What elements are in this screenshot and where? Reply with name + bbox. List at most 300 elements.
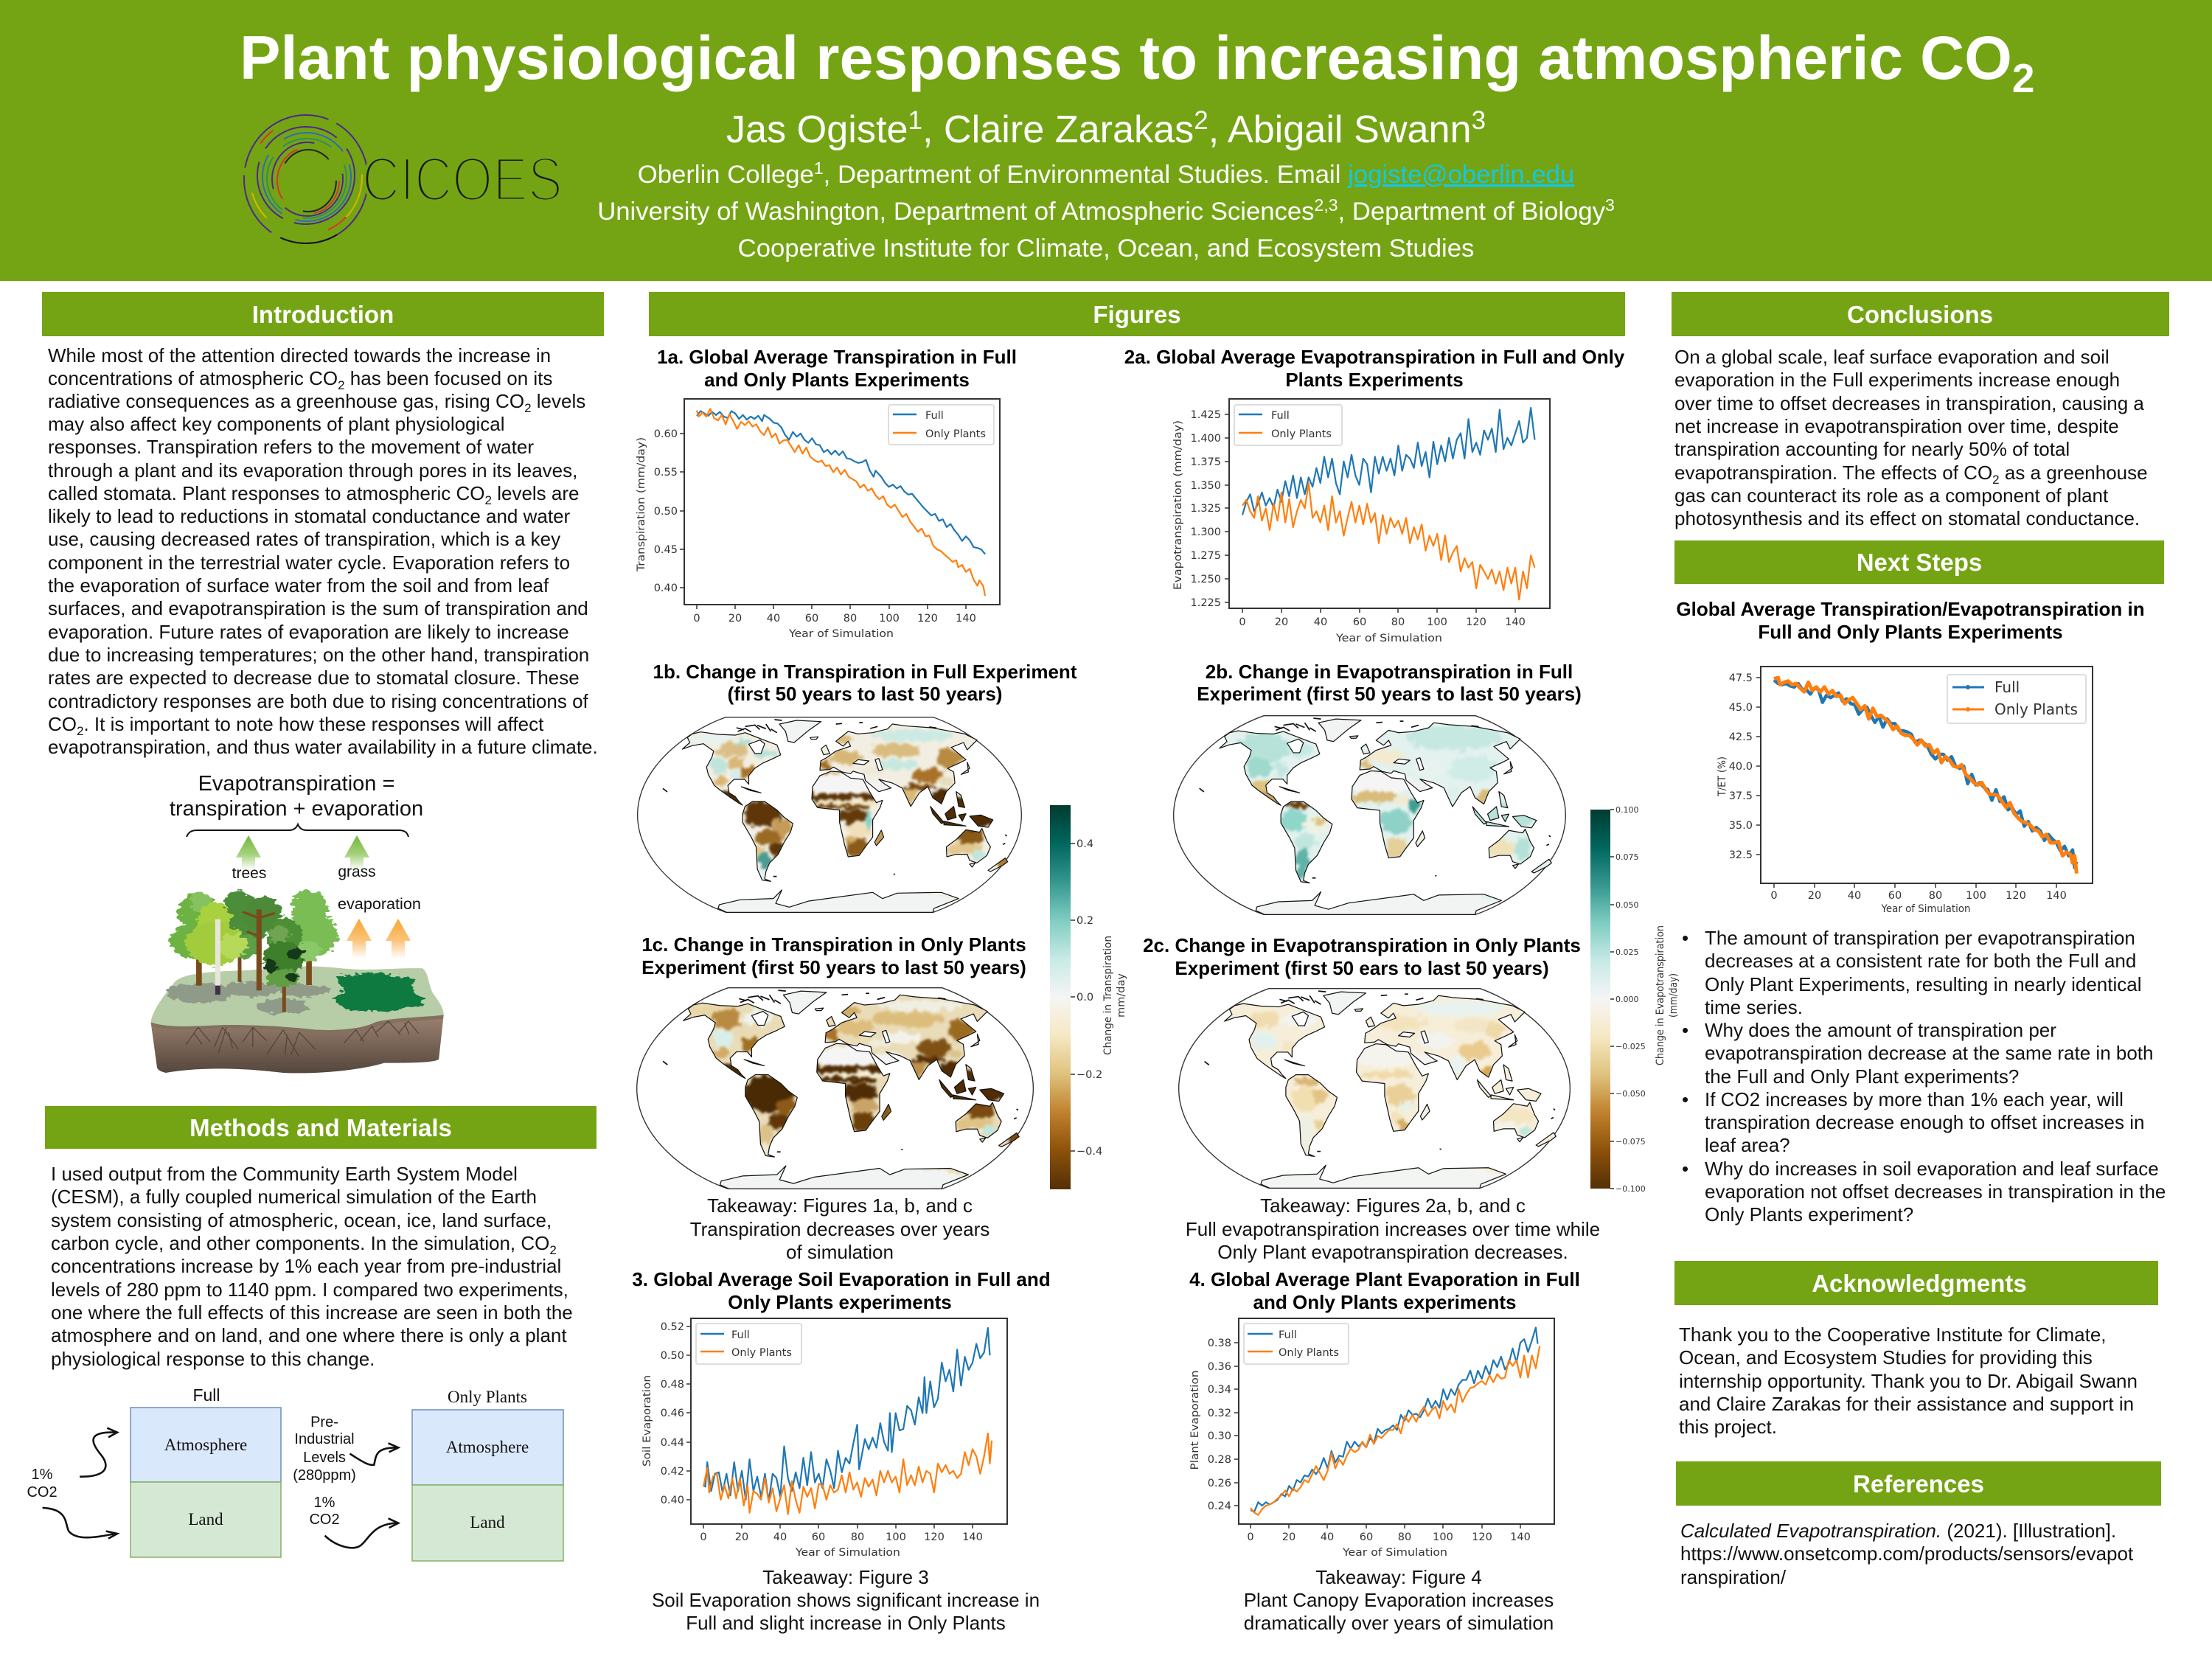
line chart: T/ET (1717, 667, 2093, 915)
line chart: 3 soil evaporation: 20 (735, 1531, 748, 1543)
heading: figure 2b: 2b. Change in Evapotranspiration in Full (1206, 661, 1573, 683)
illustration: evapotranspiration: evaporation (338, 894, 421, 913)
text block: conclusions: On a global scale, leaf surface evaporation and soil (1674, 346, 2110, 368)
line chart: 4 plant evaporation: Full (1279, 1329, 1297, 1341)
line chart: 2a evapotranspiration: 0 (1239, 616, 1246, 628)
line chart: T/ET: Full (1994, 678, 2020, 696)
heading: conclusions (1672, 292, 2169, 336)
authors: , Abigail Swann (1208, 108, 1472, 151)
line chart: 1a transpiration: 80 (844, 613, 857, 625)
text block: next steps bullets: The amount of transpiration per evapotranspiration (1705, 927, 2135, 949)
line chart: 3 soil evaporation: 40 (773, 1531, 787, 1543)
line chart: 1a transpiration: 100 (879, 613, 900, 625)
line chart: 2a evapotranspiration: Evapotranspiration (mm/day) (1172, 420, 1184, 590)
line chart: 1a transpiration: 0.50 (654, 506, 678, 518)
text block: takeaway figures 1: Takeaway: Figures 1a, b, and c (707, 1194, 973, 1217)
line chart: T/ET: 37.5 (1729, 790, 1753, 802)
panel: references (1676, 1461, 2161, 1588)
heading: figure 2a: Plants Experiments (1285, 369, 1464, 391)
line chart: 4 plant evaporation: Plant Evaporation (1189, 1370, 1201, 1470)
heading: next steps: Next Steps (1857, 549, 1982, 576)
colorbar: evapotranspiration: 0.050 (1615, 900, 1638, 910)
line chart: T/ET: 47.5 (1729, 672, 1753, 684)
line chart: 4 plant evaporation: 0.24 (1208, 1500, 1231, 1512)
line chart: 3 soil evaporation: 80 (851, 1531, 864, 1543)
label: 1% CO2 left: CO2 (27, 1484, 58, 1500)
text block: takeaway figure 3: Full and slight increase in Only Plants (686, 1612, 1006, 1634)
line chart: 3 soil evaporation: 0 (700, 1531, 707, 1543)
line chart: 4 plant evaporation (1189, 1318, 1554, 1559)
illustration: evapotranspiration (151, 772, 444, 1073)
text block: acknowledgments: internship opportunity. Thank you to Dr. Abigail Swann (1679, 1370, 2138, 1392)
text block: next steps bullets: evapotranspiration decrease at the same rate in both (1705, 1042, 2153, 1064)
text block: conclusions: as a greenhouse (2000, 462, 2148, 484)
icon: green arrow grass (344, 835, 369, 870)
colorbar: evapotranspiration: Change in Evapotranspiration (1655, 925, 1666, 1065)
text block: methods: (CESM), a fully coupled numerical simulation of the Earth (51, 1186, 537, 1208)
text block: next steps bullets: transpiration decrease enough to offset increases in (1705, 1111, 2144, 1133)
line chart: 4 plant evaporation: 80 (1398, 1531, 1411, 1543)
text block: next steps bullets: time series. (1705, 996, 1803, 1018)
authors: 3 (1472, 106, 1486, 135)
box: full experiment: Land (188, 1510, 223, 1528)
text block: next steps bullets: Why do increases in soil evaporation and leaf surface (1705, 1158, 2159, 1180)
heading: next steps chart (1676, 598, 2145, 643)
text block: conclusions: transpiration accounting for nearly 50% of total (1674, 438, 2070, 460)
label: pre-industrial and 1% CO2 middle: (280ppm) (293, 1467, 356, 1484)
line chart: 1a transpiration (636, 399, 1000, 640)
icon: orange arrow 2 (386, 919, 411, 959)
text block: next steps bullets: • (1682, 927, 1688, 949)
text block: introduction: use, causing decreased rates of transpiration, which is a key (48, 528, 560, 550)
line chart: 2a evapotranspiration (1172, 399, 1550, 644)
text block: next steps bullets: decreases at a consistent rate for both the Full and (1705, 950, 2136, 972)
text block: introduction: 2 (77, 724, 83, 738)
label: pre-industrial and 1% CO2 middle (293, 1414, 356, 1528)
line chart: 2a evapotranspiration: 140 (1505, 616, 1526, 628)
text block: conclusions: evaporation in the Full experiments increase enough (1674, 369, 2120, 391)
heading: figure 3 (632, 1268, 1051, 1313)
line chart: 2a evapotranspiration: 1.300 (1190, 526, 1221, 538)
text block: takeaway figure 4 (1244, 1566, 1554, 1634)
line chart: 3 soil evaporation: Year of Simulation (795, 1547, 900, 1559)
colorbar: transpiration (1050, 805, 1127, 1189)
heading: next steps chart: Full and Only Plants Experiments (1758, 621, 2063, 643)
text block: conclusions: gas can counteract its role as a component of plant (1674, 484, 2109, 507)
line chart: 2a evapotranspiration: 1.275 (1190, 550, 1221, 562)
line chart: 3 soil evaporation: 60 (812, 1531, 825, 1543)
line chart: T/ET: 32.5 (1729, 849, 1753, 861)
line chart: 2a evapotranspiration: 60 (1353, 616, 1366, 628)
heading: methods and materials (45, 1106, 597, 1149)
heading: introduction: Introduction (252, 301, 394, 328)
line chart: 1a transpiration: Only Plants (925, 428, 986, 440)
text block: methods: system consisting of atmospheric, ocean, ice, land surface, (51, 1209, 552, 1231)
heading: figure 2c (1143, 934, 1581, 979)
line chart: T/ET: T/ET (%) (1717, 757, 1728, 797)
text block: introduction: radiative consequences as a greenhouse gas, rising CO (48, 390, 524, 412)
line chart: 4 plant evaporation: Year of Simulation (1342, 1547, 1447, 1559)
text block: conclusions (1674, 346, 2148, 529)
label: pre-industrial and 1% CO2 middle: 1% (314, 1495, 335, 1511)
affiliation line 1: , Department of Environmental Studies. Email (824, 161, 1348, 189)
text block: methods: atmosphere and on land, and one where there is only a plant (51, 1324, 567, 1346)
text block: acknowledgments: Thank you to the Cooperative Institute for Climate, (1679, 1324, 2107, 1346)
authors: Jas Ogiste (726, 108, 908, 151)
arrows (43, 1428, 398, 1548)
line chart: 3 soil evaporation (641, 1318, 1007, 1559)
box: only plants experiment (412, 1388, 563, 1561)
colorbar: evapotranspiration: 0.100 (1615, 805, 1638, 815)
map: 1c change in transpiration only plants (636, 987, 1034, 1195)
box: only plants experiment: Land (470, 1513, 505, 1531)
text block: conclusions: 2 (1992, 473, 2000, 487)
text block: acknowledgments: and Claire Zarakas for their assistance and support in (1679, 1393, 2134, 1415)
colorbar: evapotranspiration: −0.025 (1615, 1042, 1646, 1051)
heading: methods and materials: Methods and Materials (189, 1114, 452, 1141)
affiliation line 3: Cooperative Institute for Climate, Ocean, and Ecosystem Studies (738, 234, 1474, 262)
line chart: T/ET: 140 (2046, 890, 2067, 902)
text block: takeaway figures 2 (1186, 1194, 1600, 1263)
panel: acknowledgments (1674, 1261, 2158, 1438)
text block: next steps bullets: leaf area? (1705, 1134, 1790, 1156)
box: full experiment (131, 1385, 281, 1557)
illustration: evapotranspiration: Evapotranspiration = (198, 772, 394, 796)
heading: figures: Figures (1093, 301, 1181, 328)
box: full experiment: Full (192, 1385, 220, 1405)
colorbar: transpiration: 0.2 (1077, 915, 1093, 927)
logo wordmark: CICOES (362, 145, 563, 214)
line chart: 3 soil evaporation: 0.48 (661, 1379, 684, 1391)
affiliation line 1: Oberlin College (638, 161, 814, 189)
line chart: 4 plant evaporation: 120 (1472, 1531, 1492, 1543)
text block: introduction (48, 344, 598, 758)
text block: next steps bullets: If CO2 increases by more than 1% each year, will (1705, 1088, 2124, 1110)
heading: figure 1a: 1a. Global Average Transpiration in Full (657, 346, 1017, 368)
colorbar: evapotranspiration (1590, 805, 1680, 1194)
line chart: 3 soil evaporation: Full (731, 1329, 750, 1341)
line chart: 1a transpiration: 140 (956, 613, 976, 625)
line chart: 2a evapotranspiration: Full (1271, 410, 1290, 422)
heading: introduction (42, 292, 604, 336)
heading: acknowledgments (1674, 1261, 2158, 1305)
title: Plant physiological responses to increasing atmospheric CO (240, 24, 2012, 92)
line chart: 4 plant evaporation: 60 (1360, 1531, 1373, 1543)
text block: references: Calculated Evapotranspiration. (2021). [Illustration]. (1680, 1520, 2116, 1542)
heading: figure 2c: Experiment (first 50 ears to last 50 years) (1175, 957, 1549, 979)
text block: conclusions: net increase in evapotranspiration over time, despite (1674, 415, 2119, 437)
affiliation line 2: , Department of Biology (1338, 198, 1606, 226)
text block: next steps bullets: • (1682, 1158, 1688, 1180)
line chart: 4 plant evaporation: 0.32 (1208, 1408, 1231, 1419)
line chart: 3 soil evaporation: Only Plants (731, 1347, 792, 1359)
affiliation line 2: 3 (1605, 195, 1615, 215)
text block: methods: I used output from the Community Earth System Model (51, 1163, 518, 1185)
colorbar: evapotranspiration: 0.025 (1615, 947, 1638, 957)
line chart: 2a evapotranspiration: 80 (1391, 616, 1405, 628)
line chart: T/ET: 60 (1888, 890, 1902, 902)
map: 1b change in transpiration full (637, 717, 1022, 918)
heading: next steps (1674, 540, 2164, 584)
line chart: 3 soil evaporation: Soil Evaporation (641, 1375, 653, 1467)
line chart: 4 plant evaporation: 20 (1282, 1531, 1295, 1543)
line chart: 2a evapotranspiration: Year of Simulation (1335, 633, 1442, 644)
line chart: 1a transpiration: Year of Simulation (788, 628, 894, 640)
authors: 2 (1194, 106, 1208, 135)
line chart: 4 plant evaporation: 0 (1247, 1531, 1254, 1543)
text block: introduction: levels (532, 390, 585, 412)
icon: green arrow trees (236, 835, 261, 870)
colorbar: evapotranspiration: −0.100 (1615, 1184, 1646, 1194)
line chart: 2a evapotranspiration: 1.325 (1190, 503, 1221, 515)
title: 2 (2012, 55, 2034, 101)
affiliation line 1: 1 (814, 159, 824, 178)
text block: next steps bullets: • (1682, 1088, 1688, 1110)
text block: next steps bullets: evaporation not offset decreases in transpiration in the (1705, 1180, 2166, 1203)
heading: figure 1b (653, 661, 1077, 705)
line chart: 2a evapotranspiration: Only Plants (1271, 428, 1332, 440)
text block: acknowledgments: Ocean, and Ecosystem Studies for providing this (1679, 1346, 2093, 1368)
line chart: 2a evapotranspiration: 100 (1427, 616, 1447, 628)
line chart: 4 plant evaporation: 0.26 (1208, 1478, 1231, 1489)
text block: takeaway figures 2: Full evapotranspiration increases over time while (1186, 1218, 1600, 1240)
text block: references: https://www.onsetcomp.com/products/sensors/evapot (1680, 1543, 2134, 1565)
text block: takeaway figure 3: Soil Evaporation shows significant increase in (652, 1589, 1040, 1611)
text block: conclusions: over time to offset decreases in transpiration, causing a (1674, 392, 2144, 414)
line chart: 3 soil evaporation: 0.42 (661, 1466, 684, 1478)
text block: takeaway figure 4: dramatically over years of simulation (1244, 1612, 1554, 1634)
heading: figure 4 (1189, 1268, 1580, 1313)
heading: figure 2a: 2a. Global Average Evapotranspiration in Full and Only (1124, 346, 1625, 368)
illustration: evapotranspiration: trees (232, 865, 266, 882)
text block: takeaway figure 4: Plant Canopy Evaporation increases (1244, 1589, 1554, 1611)
line chart: T/ET: Year of Simulation (1881, 903, 1970, 915)
line chart: 1a transpiration: 40 (767, 613, 780, 625)
line chart: 2a evapotranspiration: 1.425 (1190, 409, 1221, 421)
heading: figure 1a: and Only Plants Experiments (704, 369, 970, 391)
line chart: T/ET: 120 (2006, 890, 2026, 902)
text block: next steps bullets: the Full and Only Plant experiments? (1705, 1065, 2019, 1088)
line chart: 1a transpiration: 60 (805, 613, 818, 625)
text block: takeaway figures 2: Only Plant evapotranspiration decreases. (1217, 1241, 1568, 1263)
text block: takeaway figures 2: Takeaway: Figures 2a, b, and c (1260, 1194, 1526, 1217)
icon: orange arrow 1 (347, 919, 372, 959)
label: pre-industrial and 1% CO2 middle: Pre- (310, 1414, 338, 1430)
line chart: T/ET: 40.0 (1729, 761, 1753, 773)
text block: introduction: has been focused on its (345, 367, 552, 389)
heading: figure 2c: 2c. Change in Evapotranspiration in Only Plants (1143, 934, 1581, 956)
line chart: 4 plant evaporation: 0.30 (1208, 1430, 1231, 1442)
illustration: evapotranspiration: grass (338, 863, 376, 880)
heading: figure 4: and Only Plants experiments (1253, 1291, 1516, 1313)
text block: introduction: through a plant and its evaporation through pores in its leaves, (48, 459, 577, 481)
colorbar: transpiration: Change in Transpiration (1102, 936, 1114, 1055)
heading: next steps chart: Global Average Transpiration/Evapotranspiration in (1676, 598, 2145, 620)
line chart: 1a transpiration: 0.55 (654, 467, 678, 479)
map: 2b change in evapotranspiration full (1173, 715, 1566, 920)
text block: methods: levels of 280 ppm to 1140 ppm. I compared two experiments, (51, 1279, 568, 1301)
text block: introduction: likely to lead to reductions in stomatal conductance and water (48, 505, 571, 527)
text block: next steps bullets (1682, 927, 2166, 1225)
heading: figure 1b: (first 50 years to last 50 years) (728, 683, 1002, 705)
line chart: 2a evapotranspiration: 1.250 (1190, 574, 1221, 585)
text block: acknowledgments: this project. (1679, 1416, 1777, 1438)
header banner (0, 0, 2212, 281)
colorbar: evapotranspiration: 0.075 (1615, 852, 1638, 862)
affiliation line 2: University of Washington, Department of Atmospheric Sciences (597, 198, 1315, 226)
text block: conclusions: evapotranspiration. The effects of CO (1674, 462, 1992, 484)
heading: figure 4: 4. Global Average Plant Evaporation in Full (1189, 1268, 1580, 1290)
authors: 1 (908, 106, 922, 135)
heading: figure 3: Only Plants experiments (728, 1291, 952, 1313)
line chart: 2a evapotranspiration: 1.375 (1190, 456, 1221, 468)
box: only plants experiment: Only Plants (448, 1388, 527, 1406)
illustration: evapotranspiration: transpiration + evaporation (170, 797, 423, 821)
line chart: 1a transpiration: 0.45 (654, 544, 678, 556)
text block: takeaway figure 4: Takeaway: Figure 4 (1315, 1566, 1482, 1588)
text block: introduction: called stomata. Plant responses to atmospheric CO (48, 482, 485, 504)
text block: introduction: responses. Transpiration refers to the movement of water (48, 436, 534, 458)
text block: introduction: concentrations of atmospheric CO (48, 367, 338, 389)
text block: takeaway figures 1: Transpiration decreases over years (690, 1218, 990, 1240)
colorbar: transpiration: mm/day (1116, 973, 1127, 1018)
line chart: 1a transpiration: Transpiration (mm/day) (636, 437, 647, 572)
box: full experiment: Atmosphere (164, 1436, 247, 1454)
text block: introduction: 2 (485, 493, 492, 507)
line chart: 1a transpiration: 20 (728, 613, 742, 625)
line chart: 1a transpiration: 0 (693, 613, 700, 625)
line chart: T/ET: 100 (1966, 890, 1986, 902)
line chart: T/ET: 40 (1848, 890, 1861, 902)
text block: introduction: contradictory responses are both due to rising concentrations of (48, 690, 589, 712)
line chart: 2a evapotranspiration: 1.225 (1190, 597, 1221, 609)
text block: methods: one where the full effects of this increase are seen in both the (51, 1301, 573, 1324)
line chart: 4 plant evaporation: 140 (1510, 1531, 1531, 1543)
line chart: 2a evapotranspiration: 1.350 (1190, 480, 1221, 492)
text block: takeaway figures 1 (690, 1194, 990, 1263)
label: 1% CO2 left (27, 1467, 58, 1500)
text block: methods: 2 (549, 1243, 557, 1257)
map: 2c change in evapotranspiration only plants (1178, 988, 1571, 1194)
line chart: 4 plant evaporation: 40 (1321, 1531, 1334, 1543)
text block: next steps bullets: Only Plants experiment? (1705, 1203, 1913, 1225)
text block: introduction: surfaces, and evapotranspiration is the sum of transpiration and (48, 597, 588, 619)
heading: references (1676, 1461, 2161, 1506)
panel: next steps (1674, 540, 2166, 1225)
heading: figure 1a (657, 346, 1017, 391)
text block: methods: physiological response to this change. (51, 1348, 375, 1370)
diagram: experiment design (27, 1385, 563, 1561)
panel: methods and materials (27, 1106, 597, 1561)
panel: introduction (42, 292, 604, 1073)
line chart: 1a transpiration: 0.40 (654, 582, 678, 594)
text block: introduction: While most of the attention directed towards the increase in (48, 344, 551, 366)
line chart: 3 soil evaporation: 0.46 (661, 1408, 684, 1419)
affiliation line 1: jogiste@oberlin.edu (1347, 161, 1574, 189)
colorbar: evapotranspiration: 0.000 (1615, 995, 1638, 1004)
text block: introduction: levels are (492, 482, 579, 504)
text block: takeaway figure 3: Takeaway: Figure 3 (762, 1566, 929, 1588)
text block: introduction: evapotranspiration, and thus water availability in a future climate. (48, 736, 598, 758)
line chart: 1a transpiration: 0.60 (654, 428, 678, 440)
line chart: 3 soil evaporation: 120 (924, 1531, 945, 1543)
line chart: T/ET: 35.0 (1729, 820, 1753, 832)
line chart: T/ET: 0 (1770, 890, 1778, 902)
text block: next steps bullets: Why does the amount of transpiration per (1705, 1019, 2056, 1041)
colorbar: transpiration: 0.4 (1077, 838, 1093, 850)
line chart: 3 soil evaporation: 0.52 (661, 1321, 684, 1333)
heading: figure 1c: 1c. Change in Transpiration in Only Plants (641, 933, 1026, 956)
line chart: 2a evapotranspiration: 1.400 (1190, 433, 1221, 445)
line chart: 1a transpiration: 120 (917, 613, 938, 625)
heading: acknowledgments: Acknowledgments (1812, 1270, 2027, 1297)
text block: introduction: evaporation. Future rates of evaporation are likely to increase (48, 621, 569, 643)
heading: figure 2a (1124, 346, 1625, 391)
line chart: 3 soil evaporation: 0.40 (661, 1495, 684, 1506)
label: pre-industrial and 1% CO2 middle: Levels (303, 1450, 346, 1466)
logo: CICOES (244, 115, 563, 243)
text block: methods (51, 1163, 573, 1370)
affiliation line 2: 2,3 (1315, 195, 1338, 215)
line chart: T/ET: 42.5 (1729, 731, 1753, 743)
line chart: 2a evapotranspiration: 40 (1314, 616, 1327, 628)
text block: introduction: due to increasing temperatures; on the other hand, transpiration (48, 644, 589, 666)
heading: figure 3: 3. Global Average Soil Evaporation in Full and (632, 1268, 1051, 1290)
colorbar: transpiration: −0.4 (1077, 1146, 1102, 1158)
text block: methods: concentrations increase by 1% each year from pre-industrial (51, 1255, 561, 1277)
text block: methods: carbon cycle, and other components. In the simulation, CO (51, 1232, 549, 1254)
text block: acknowledgments (1679, 1324, 2138, 1438)
heading: figure 1c (641, 933, 1026, 978)
line chart: 3 soil evaporation: 0.44 (661, 1437, 684, 1449)
text block: takeaway figures 1: of simulation (786, 1241, 894, 1263)
panel: conclusions (1672, 292, 2169, 529)
line chart: 4 plant evaporation: 0.34 (1208, 1384, 1231, 1396)
heading: figure 1c: Experiment (first 50 years to last 50 years) (641, 956, 1026, 978)
line chart: 4 plant evaporation: 0.28 (1208, 1454, 1231, 1466)
colorbar: evapotranspiration: (mm/day) (1668, 973, 1680, 1018)
text block: conclusions: photosynthesis and its effect on stomatal conductance. (1674, 507, 2140, 529)
authors: , Claire Zarakas (922, 108, 1194, 151)
text block: next steps bullets: • (1682, 1019, 1688, 1041)
text block: references: ranspiration/ (1680, 1566, 1787, 1588)
colorbar: evapotranspiration: −0.075 (1615, 1137, 1646, 1147)
text block: introduction: 2 (524, 401, 532, 415)
colorbar: evapotranspiration: −0.050 (1615, 1089, 1646, 1099)
text block: introduction: the evaporation of surface water from the soil and from leaf (48, 574, 549, 597)
heading: figure 1b: 1b. Change in Transpiration in Full Experiment (653, 661, 1077, 683)
text block: references (1680, 1520, 2134, 1588)
box: only plants experiment: Atmosphere (446, 1438, 529, 1456)
colorbar: transpiration: 0.0 (1077, 992, 1093, 1004)
heading: figure 2b: Experiment (first 50 years to last 50 years) (1197, 683, 1582, 705)
line chart: 4 plant evaporation: 100 (1433, 1531, 1453, 1543)
line chart: T/ET: 45.0 (1729, 702, 1753, 714)
line chart: 2a evapotranspiration: 120 (1466, 616, 1486, 628)
line chart: 4 plant evaporation: Only Plants (1279, 1347, 1339, 1359)
line chart: 1a transpiration: Full (925, 410, 944, 422)
text block: next steps bullets: Only Plant Experiments, resulting in nearly identical (1705, 973, 2142, 995)
text block: introduction: . It is important to note how these responses will affect (83, 713, 544, 735)
text block: takeaway figure 3 (652, 1566, 1040, 1634)
line chart: 3 soil evaporation: 140 (962, 1531, 983, 1543)
label: pre-industrial and 1% CO2 middle: Industrial (294, 1431, 355, 1447)
line chart: 3 soil evaporation: 0.50 (661, 1350, 684, 1362)
line chart: 4 plant evaporation: 0.36 (1208, 1361, 1231, 1373)
line chart: T/ET: 20 (1808, 890, 1821, 902)
text block: introduction: rates are expected to decrease due to stomatal closure. These (48, 667, 580, 689)
panel: figures (632, 292, 1680, 1634)
